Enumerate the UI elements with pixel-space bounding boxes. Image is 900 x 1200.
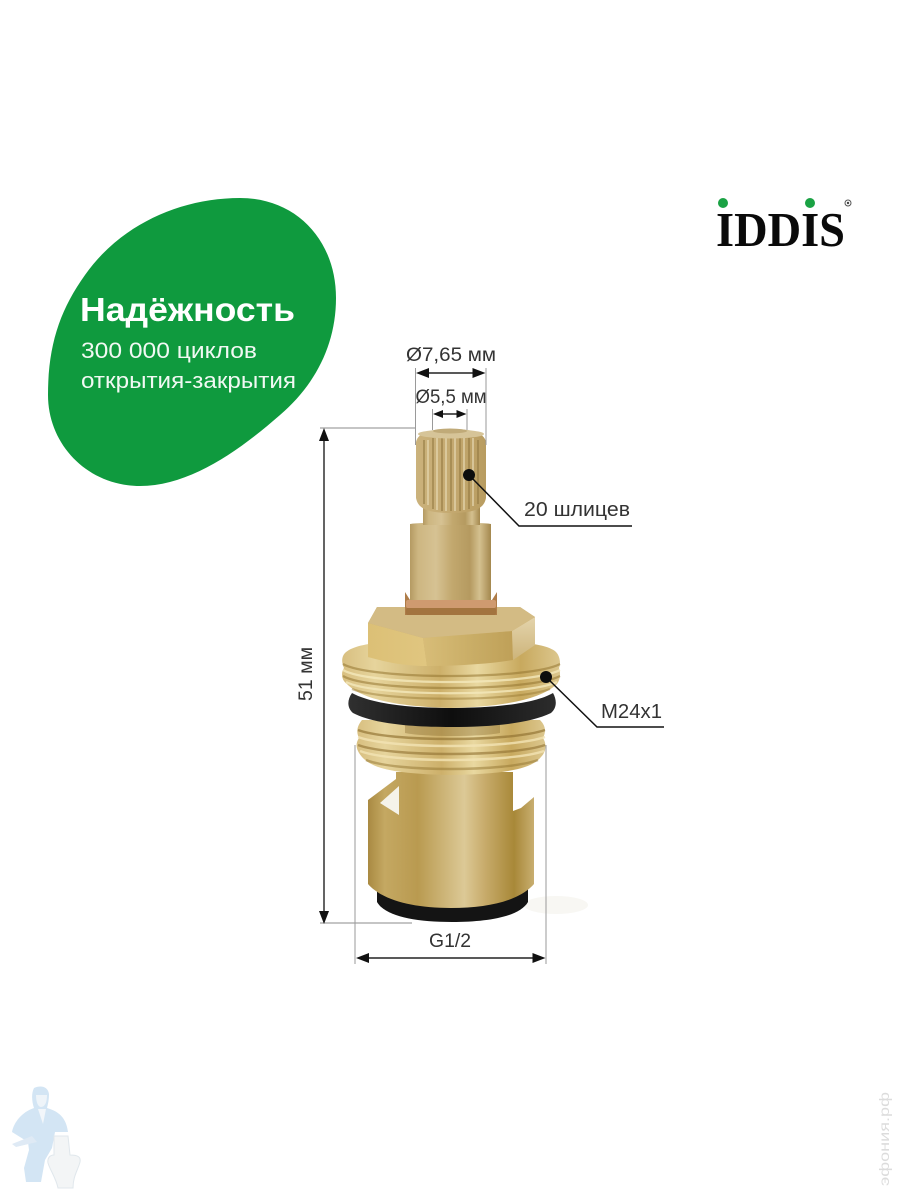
icon: plumber watermark: [12, 1086, 80, 1188]
callout: 20 splines: 20 шлицев: [524, 499, 630, 521]
callout: 20 splines: [463, 469, 632, 526]
text: cycles count: 300 000 циклов: [81, 338, 257, 363]
hex nut: [368, 607, 535, 666]
neck: [423, 505, 480, 525]
dimension: diameter 5,5 mm: [416, 387, 486, 430]
soft shadow: [524, 896, 588, 914]
dimension: G1/2: [355, 745, 546, 964]
splined stem: [416, 428, 486, 513]
dimension: diameter 7,65 mm: Ø7,65 мм: [406, 345, 496, 366]
text: open-close: открытия-закрытия: [81, 368, 296, 393]
copper clip: [405, 592, 497, 615]
bottom rubber seal: [377, 885, 528, 922]
lower thread: [357, 720, 545, 775]
callout: M24x1 thread: [540, 671, 664, 727]
lower body: [368, 772, 534, 908]
flange thread: [342, 642, 560, 708]
dimension: G1/2: G1/2: [429, 931, 471, 952]
product: brass cartridge valve: [342, 428, 588, 922]
dimension: height 51 mm: [296, 428, 416, 924]
callout: M24x1 thread: M24x1: [601, 701, 662, 723]
logo: IDDIS: IDDIS: [716, 202, 845, 257]
text: site watermark: эфония.рф: [876, 1092, 892, 1186]
green blob background: [48, 198, 336, 486]
dimension: height 51 mm: 51 мм: [296, 647, 317, 701]
panel: green blob callout: [48, 198, 336, 486]
upper cylinder: [410, 522, 491, 600]
o-ring: [348, 693, 556, 727]
dimension: diameter 5,5 mm: Ø5,5 мм: [416, 387, 486, 408]
heading: reliability: Надёжность: [80, 291, 295, 328]
dimension: diameter 7,65 mm: [406, 345, 496, 445]
